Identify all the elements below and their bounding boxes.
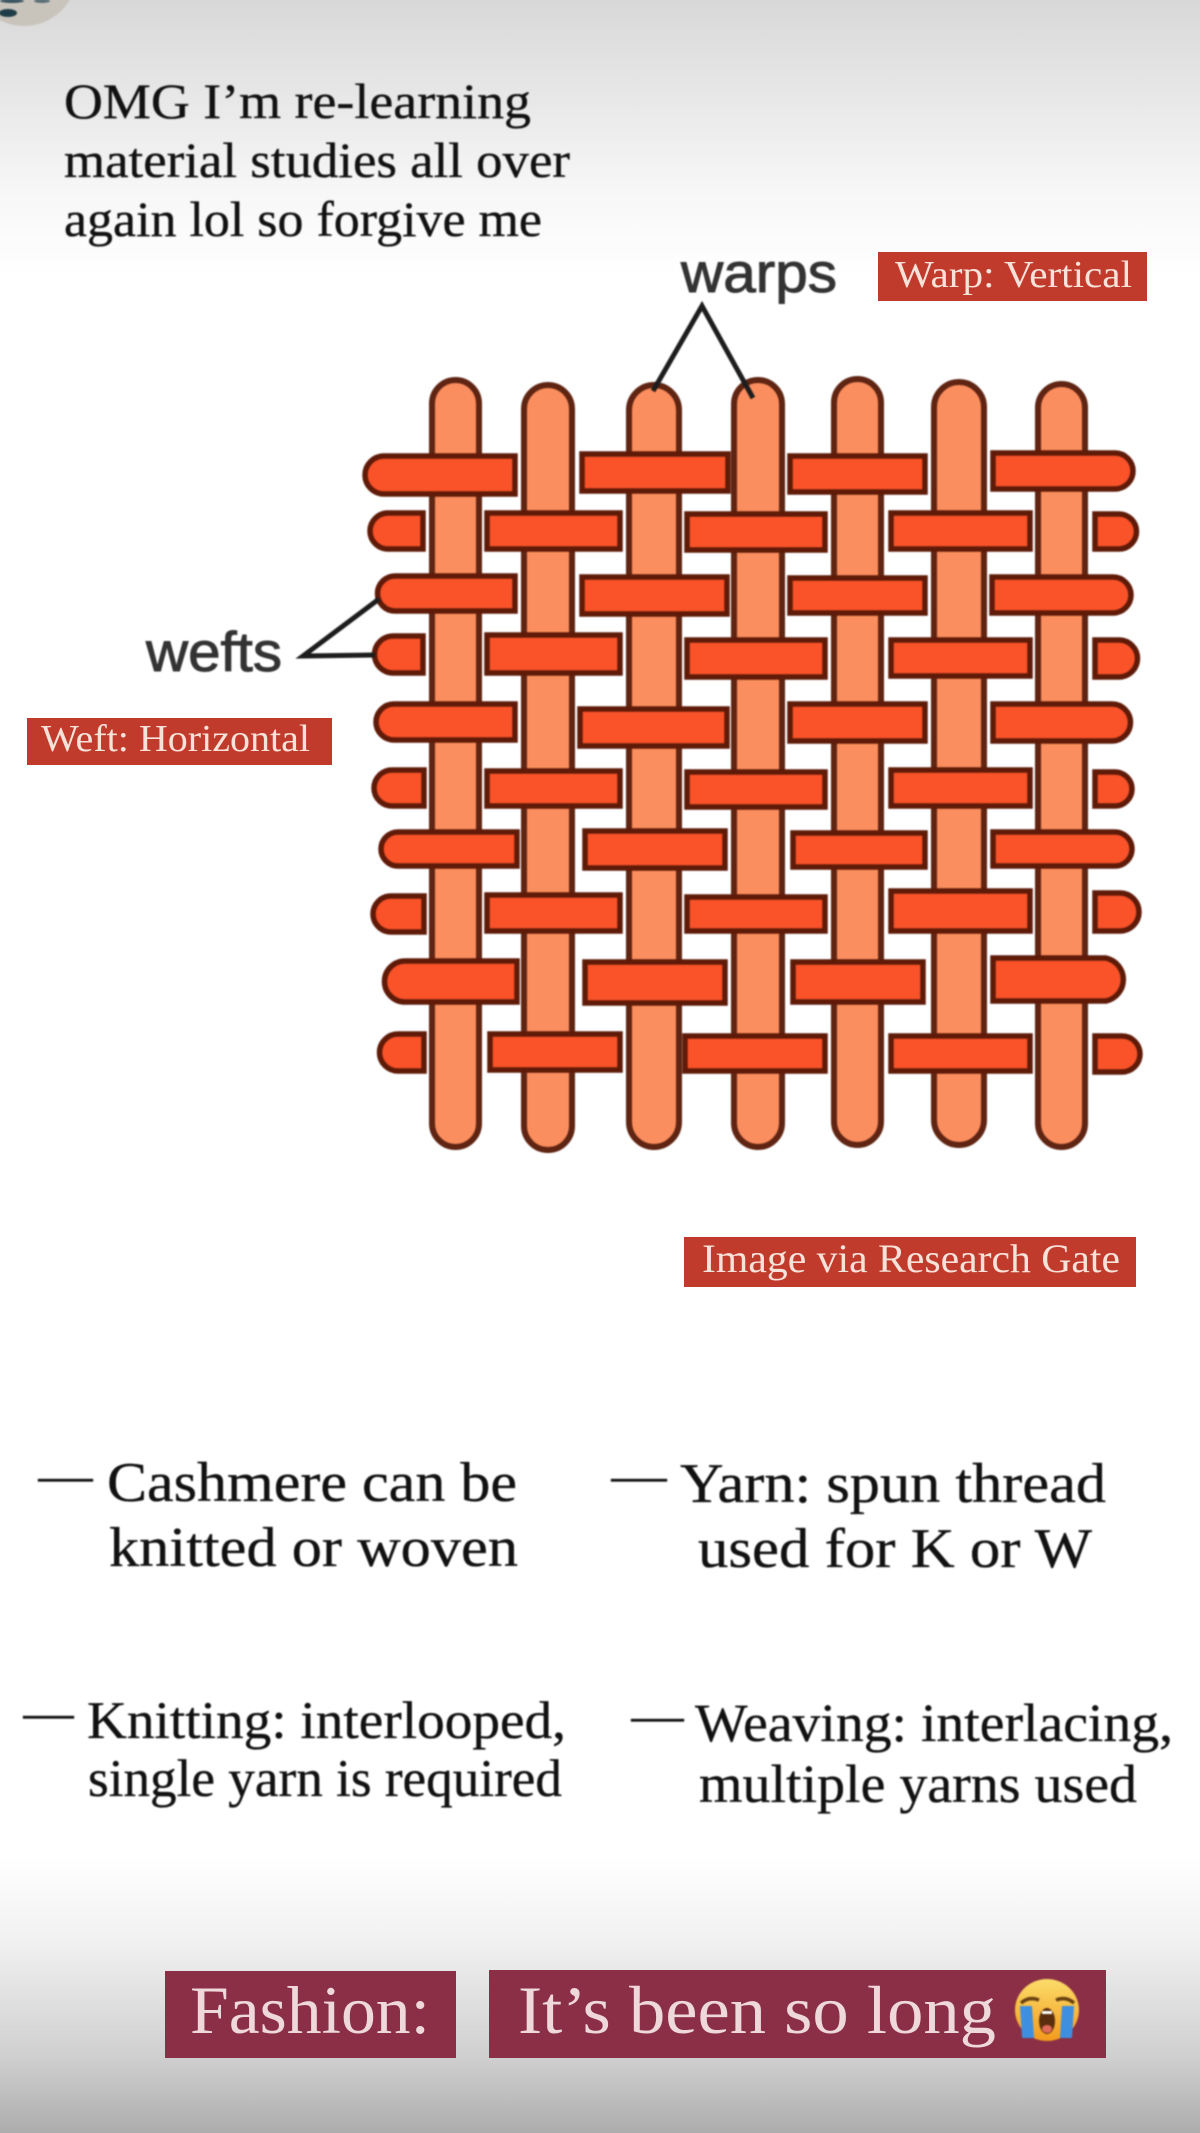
note: weaving [631,1693,1173,1814]
wefts label with arrow lines [145,599,379,683]
note: cashmere: knitted or woven [109,1517,518,1579]
note: knitting: Knitting: interlooped, [87,1692,566,1750]
note: weaving: multiple yarns used [699,1754,1137,1814]
intro text: again lol so forgive me [64,191,542,247]
intro text: material studies all over [64,132,570,188]
weave diagram [365,379,1140,1150]
tag: image credit: Image via Research Gate [702,1236,1120,1281]
icon: crying face [1015,1979,1079,2041]
intro text: OMG I’m re-learning [64,73,531,129]
warps label with arrow lines [653,241,837,398]
note: cashmere [38,1452,518,1579]
banner: it's been so long [489,1970,1106,2058]
warps label with arrow lines: warps [680,241,837,304]
banner: it's been so long: It’s been so long [518,1972,996,2048]
note: cashmere: Cashmere can be [107,1452,517,1514]
avatar circle [0,0,77,26]
tag: weft horizontal: Weft: Horizontal [41,718,310,760]
wefts label with arrow lines: wefts [145,620,282,683]
intro text [64,73,570,247]
note: knitting: single yarn is required [88,1750,562,1808]
note: yarn: used for K or W [698,1518,1092,1580]
note: knitting [23,1692,566,1808]
warp threads [432,379,1085,1150]
note: weaving: Weaving: interlacing, [695,1693,1173,1753]
banner: fashion: Fashion: [190,1972,430,2048]
tag: warp vertical [878,252,1147,301]
weft threads [365,453,1140,1072]
tag: warp vertical: Warp: Vertical [895,254,1132,296]
note: yarn [611,1453,1106,1580]
note: yarn: Yarn: spun thread [680,1453,1106,1515]
